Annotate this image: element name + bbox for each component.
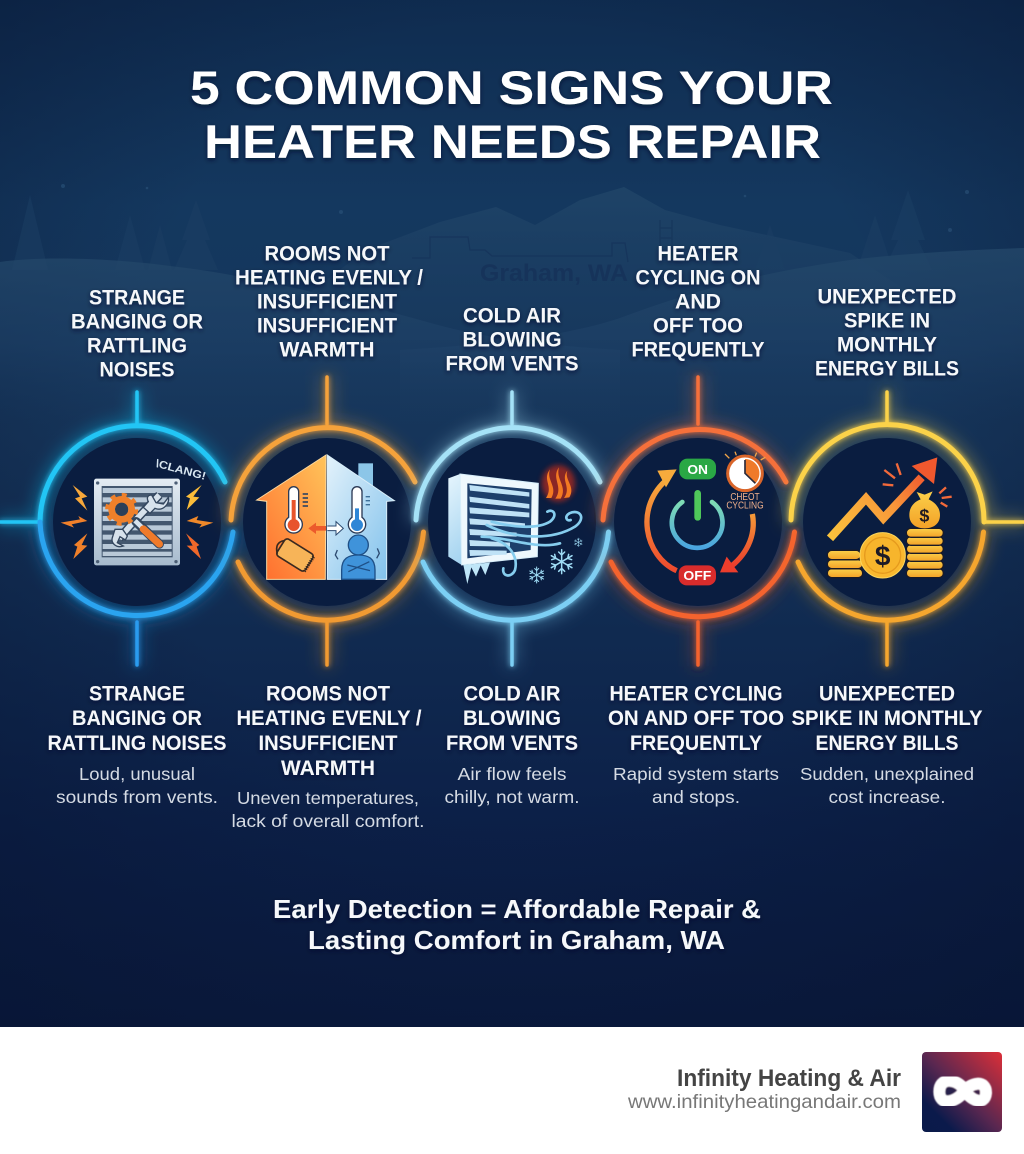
bottom labels and descriptions: RATTLING NOISES: [48, 732, 226, 755]
bottom labels and descriptions: [48, 682, 982, 831]
top labels: SPIKE IN: [844, 310, 930, 332]
top labels: ROOMS NOT: [264, 242, 390, 266]
bottom labels and descriptions: cost increase.: [828, 787, 946, 807]
ring 1: noises: [0, 392, 233, 665]
bottom labels and descriptions: FROM VENTS: [446, 732, 578, 755]
bottom labels and descriptions: COLD AIR: [464, 682, 560, 706]
icon: rattling vent with wrench: [61, 458, 213, 565]
bottom labels and descriptions: Loud, unusual: [79, 764, 195, 784]
top labels: HEATING EVENLY /: [235, 266, 423, 290]
icon: on off cycling power: CYCLING: [726, 501, 764, 512]
bottom labels and descriptions: sounds from vents.: [56, 787, 218, 807]
icon: on off cycling power: ON: [687, 462, 708, 477]
closing tagline: [273, 894, 761, 955]
bottom labels and descriptions: INSUFFICIENT: [258, 732, 398, 755]
icon: rising bills and coins: $: [919, 505, 929, 525]
icon: rattling vent with wrench: \CLANG!: [154, 458, 207, 483]
top labels: COLD AIR: [463, 304, 561, 328]
title: 5 COMMON SIGNS YOUR: [190, 61, 833, 114]
bottom labels and descriptions: SPIKE IN MONTHLY: [792, 707, 982, 730]
top labels: WARMTH: [280, 338, 374, 362]
icon: rising bills and coins: $: [875, 540, 891, 571]
icon: rising bills and coins: [827, 457, 952, 578]
bottom labels and descriptions: Air flow feels: [458, 764, 567, 784]
bottom labels and descriptions: Sudden, unexplained: [800, 764, 974, 784]
website: www.infinityheatingandair.com: [627, 1091, 901, 1113]
bottom labels and descriptions: BLOWING: [463, 707, 561, 730]
top labels: CYCLING ON: [636, 266, 760, 290]
bottom labels and descriptions: STRANGE: [89, 682, 185, 706]
brand name: Infinity Heating & Air: [677, 1065, 901, 1092]
bottom labels and descriptions: UNEXPECTED: [819, 682, 955, 706]
footer: [0, 1027, 1024, 1154]
icon: cold air vent: [448, 465, 582, 584]
closing tagline: Early Detection = Affordable Repair &: [273, 894, 761, 924]
bottom labels and descriptions: and stops.: [652, 787, 740, 807]
top labels: MONTHLY: [837, 334, 937, 356]
title: HEATER NEEDS REPAIR: [204, 115, 821, 168]
bottom labels and descriptions: Uneven temperatures,: [237, 788, 419, 808]
top labels: UNEXPECTED: [818, 286, 956, 308]
bottom labels and descriptions: HEATING EVENLY /: [236, 707, 422, 730]
ring 2: uneven heating: [231, 377, 424, 665]
bottom labels and descriptions: ENERGY BILLS: [816, 732, 958, 755]
ring 5: energy bills: [791, 392, 1024, 665]
top labels: NOISES: [100, 358, 174, 382]
winter landscape backdrop: Graham, WA: [480, 260, 628, 287]
bottom labels and descriptions: BANGING OR: [72, 707, 202, 730]
top labels: FROM VENTS: [446, 352, 578, 376]
icon: on off cycling power: OFF: [683, 568, 711, 583]
bottom labels and descriptions: ON AND OFF TOO: [608, 707, 784, 730]
top labels: INSUFFICIENT: [257, 290, 397, 314]
title: [190, 61, 833, 168]
top labels: INSUFFICIENT: [257, 314, 397, 338]
bottom labels and descriptions: ROOMS NOT: [266, 682, 390, 706]
top labels: HEATER: [658, 242, 738, 266]
top labels: AND: [675, 290, 721, 314]
closing tagline: Lasting Comfort in Graham, WA: [308, 925, 725, 955]
bottom labels and descriptions: Rapid system starts: [613, 764, 779, 784]
winter landscape backdrop: [0, 184, 1024, 430]
top labels: OFF TOO: [653, 314, 743, 338]
bottom labels and descriptions: HEATER CYCLING: [610, 682, 782, 706]
ring 4: short cycling: [603, 377, 794, 665]
top labels: BANGING OR: [71, 310, 203, 334]
top labels: BLOWING: [462, 328, 562, 352]
logo: [922, 1052, 1002, 1132]
top labels: FREQUENTLY: [632, 338, 764, 362]
top labels: [71, 242, 959, 382]
bottom labels and descriptions: WARMTH: [281, 757, 375, 780]
icon: on off cycling power: CHEOT: [730, 492, 760, 503]
top labels: ENERGY BILLS: [815, 358, 959, 380]
top labels: RATTLING: [87, 334, 187, 358]
icon: half hot half cold house: [257, 455, 394, 579]
icon: on off cycling power: [647, 452, 765, 585]
bottom labels and descriptions: chilly, not warm.: [444, 787, 580, 807]
bottom labels and descriptions: lack of overall comfort.: [232, 811, 424, 831]
ring 3: cold air: [416, 392, 608, 665]
bottom labels and descriptions: FREQUENTLY: [630, 732, 762, 755]
top labels: STRANGE: [89, 286, 185, 310]
